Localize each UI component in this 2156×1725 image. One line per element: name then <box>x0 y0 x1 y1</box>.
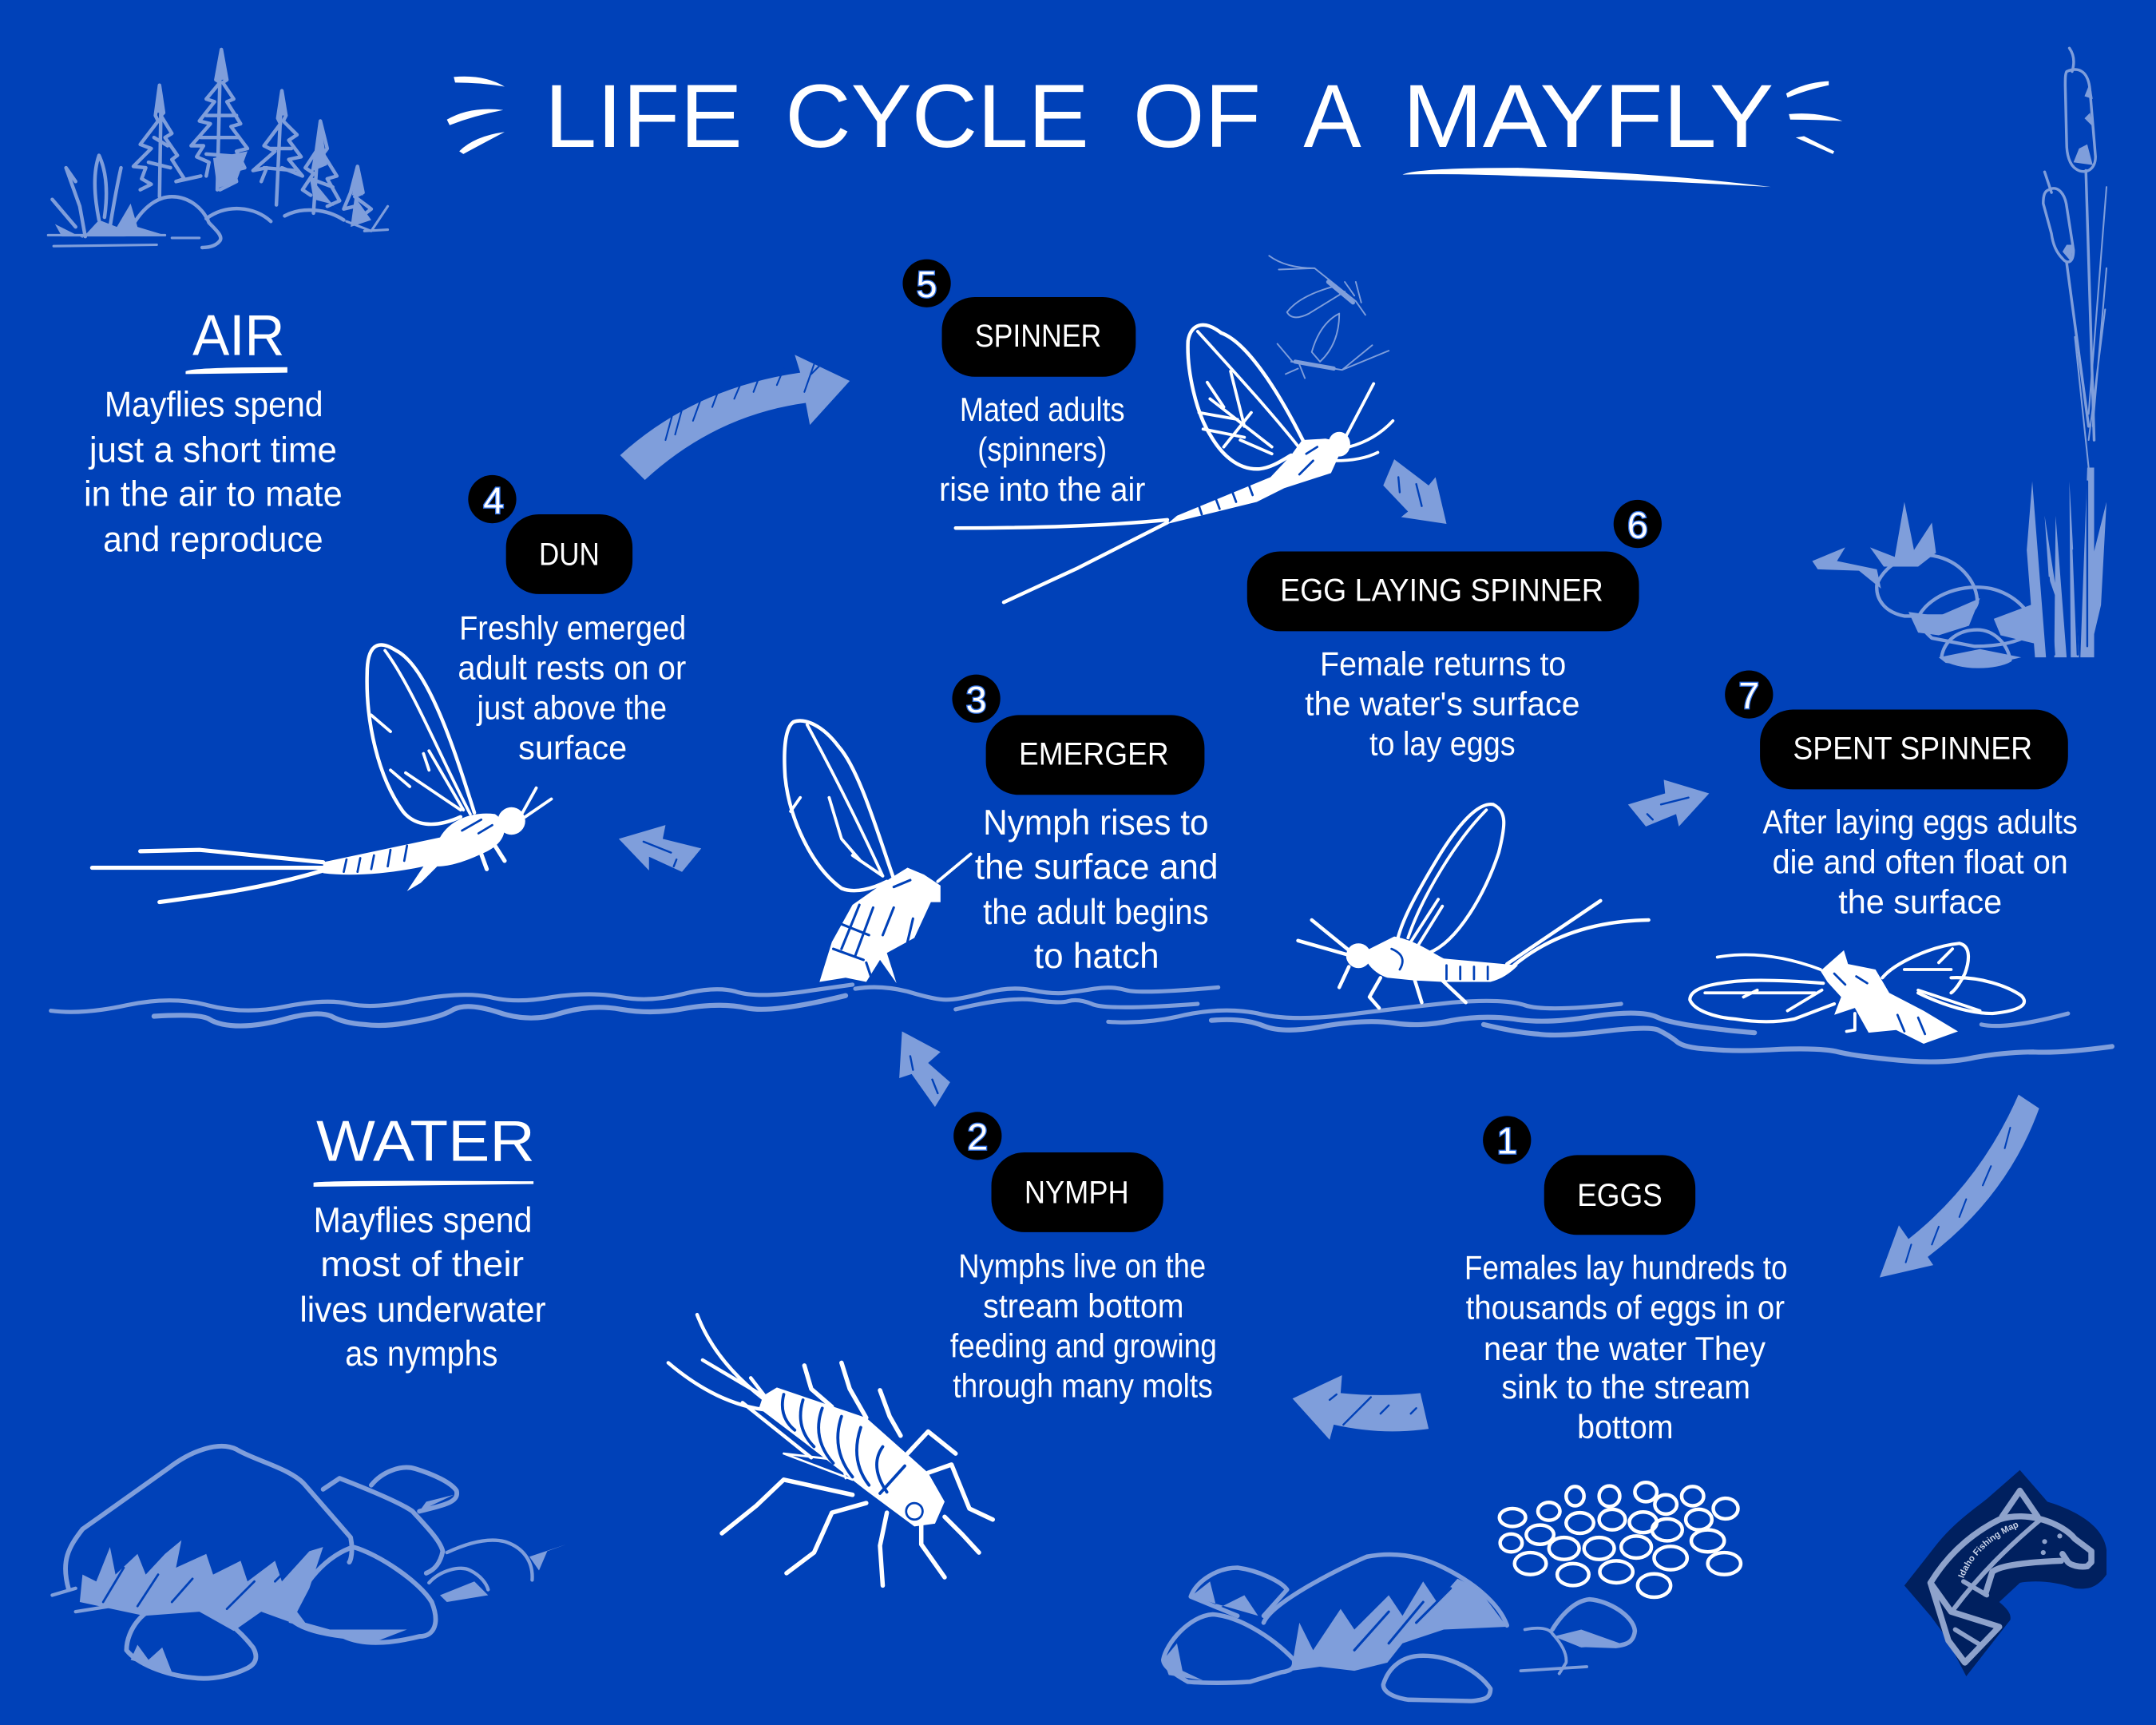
number badge 7 <box>1725 670 1773 719</box>
label: egg laying spinner <box>1247 551 1639 631</box>
insect: dun mayfly <box>92 644 551 902</box>
label: egg laying spinner: EGG LAYING SPINNER <box>1280 573 1603 608</box>
arrow: egg laying to spent spinner <box>1628 779 1709 827</box>
panel: step 6 egg laying spinner <box>1247 500 1662 762</box>
text: water description: lives underwater <box>299 1290 546 1330</box>
label: eggs: EGGS <box>1577 1178 1663 1213</box>
number badge 3: 3 <box>966 679 987 720</box>
text: eggs description: Females lay hundreds to <box>1464 1249 1788 1286</box>
text: egg laying description: the water's surface <box>1305 685 1580 722</box>
logo: Idaho Fishing Map fish <box>1904 1469 2106 1676</box>
panel: step 1 eggs <box>1464 1116 1788 1445</box>
illustration: pine trees and rocks <box>48 50 388 248</box>
text: spent spinner description <box>1763 803 2078 920</box>
text: dun description: surface <box>518 730 627 767</box>
text: dun description <box>458 610 686 767</box>
panel: step 4 dun <box>458 475 686 767</box>
insect: emerger <box>784 721 971 983</box>
illustration: river rocks right <box>1163 1555 1635 1701</box>
number badge 4 <box>468 475 517 523</box>
title <box>545 66 1774 166</box>
text: air description: just a short time <box>88 430 337 470</box>
label: nymph <box>992 1152 1163 1232</box>
number badge 7: 7 <box>1738 675 1759 716</box>
river water lines <box>51 985 2112 1062</box>
underline: water <box>314 1181 533 1187</box>
text: water description <box>299 1200 546 1374</box>
text: eggs description: sink to the stream <box>1501 1369 1750 1406</box>
insect: spent spinner <box>1690 943 2024 1044</box>
number badge 2 <box>953 1112 1001 1160</box>
arrow: dun to spinner <box>620 355 850 480</box>
panel: step 7 spent spinner <box>1725 670 2078 920</box>
number badge 1: 1 <box>1496 1120 1517 1162</box>
title: A <box>1303 66 1361 166</box>
text: egg laying description: Female returns to <box>1320 645 1566 682</box>
text: spinner description <box>939 391 1146 508</box>
text: water description: as nymphs <box>345 1334 497 1374</box>
underline: air <box>185 367 287 374</box>
illustration: cattails and reeds <box>1813 48 2106 667</box>
number badge 1 <box>1483 1116 1531 1164</box>
illustration: eggs <box>1500 1482 1741 1597</box>
text: eggs description: near the water They <box>1484 1330 1766 1367</box>
panel: step 2 nymph <box>950 1112 1217 1404</box>
text: air description: Mayflies spend <box>105 385 323 425</box>
heading: water: WATER <box>316 1109 535 1173</box>
insect: spinner <box>956 325 1393 602</box>
text: spinner description: Mated adults <box>960 391 1125 428</box>
text: spent spinner description: the surface <box>1838 883 2002 920</box>
label: spent spinner: SPENT SPINNER <box>1793 732 2032 767</box>
text: nymph description: through many molts <box>953 1367 1213 1404</box>
label: eggs <box>1544 1155 1695 1235</box>
insect: egg laying spinner <box>1298 804 1649 1008</box>
text: water description: most of their <box>320 1244 524 1284</box>
arrow: eggs to nymph <box>1293 1375 1429 1440</box>
text: air description: in the air to mate <box>84 474 343 514</box>
label: dun <box>506 514 632 594</box>
label: spinner <box>942 297 1135 377</box>
text: air description: and reproduce <box>103 519 323 559</box>
text: spent spinner description: After laying eggs adults <box>1763 803 2078 840</box>
text: dun description: just above the <box>476 690 667 727</box>
heading: air: AIR <box>192 303 284 367</box>
number badge 6: 6 <box>1627 504 1648 545</box>
text: emerger description <box>975 803 1219 976</box>
title: CYCLE <box>785 66 1089 166</box>
text: emerger description: the adult begins <box>983 892 1209 932</box>
text: nymph description: stream bottom <box>983 1288 1184 1325</box>
text: dun description: adult rests on or <box>458 650 686 687</box>
insect: nymph <box>668 1315 993 1585</box>
panel: step 3 emerger <box>952 675 1219 976</box>
arrow: nymph to emerger <box>899 1031 950 1107</box>
faded background mayflies <box>1269 256 1389 379</box>
title: OF <box>1133 66 1261 166</box>
logo: Idaho Fishing Map fish: Idaho Fishing Map <box>1958 1522 2019 1578</box>
text: egg laying description <box>1305 645 1580 762</box>
text: dun description: Freshly emerged <box>459 610 686 647</box>
text: nymph description <box>950 1248 1217 1404</box>
label: spinner: SPINNER <box>975 319 1101 354</box>
label: emerger: EMERGER <box>1019 736 1169 771</box>
text: emerger description: to hatch <box>1034 936 1159 976</box>
text: spinner description: rise into the air <box>939 471 1146 508</box>
title accent marks and underline <box>447 77 1842 187</box>
text: nymph description: feeding and growing <box>950 1328 1217 1365</box>
label: nymph: NYMPH <box>1024 1176 1129 1211</box>
label: dun: DUN <box>539 537 600 573</box>
text: eggs description: thousands of eggs in or <box>1466 1289 1785 1326</box>
text: emerger description: Nymph rises to <box>983 803 1209 843</box>
number badge 5: 5 <box>917 264 937 305</box>
label: emerger <box>986 715 1204 795</box>
text: eggs description: bottom <box>1577 1409 1674 1445</box>
number badge 3 <box>952 675 1001 723</box>
panel: step 5 spinner <box>902 260 1146 508</box>
title: LIFE <box>545 66 743 166</box>
text: eggs description <box>1464 1249 1788 1445</box>
number badge 4: 4 <box>483 479 504 521</box>
panel: air <box>84 303 343 559</box>
label: spent spinner <box>1760 710 2068 789</box>
title: MAYFLY <box>1402 66 1774 166</box>
number badge 2: 2 <box>967 1116 988 1158</box>
arrow: spinner to egg laying <box>1383 459 1446 524</box>
number badge 6 <box>1614 500 1662 548</box>
illustration: river rocks left <box>52 1446 566 1679</box>
panel: water <box>299 1109 546 1374</box>
text: air description <box>84 385 343 559</box>
arrow: emerger to dun <box>619 825 701 872</box>
text: egg laying description: to lay eggs <box>1369 725 1516 762</box>
text: nymph description: Nymphs live on the <box>958 1248 1206 1285</box>
arrow: spent spinner to eggs <box>1880 1095 2039 1278</box>
text: spent spinner description: die and often float on <box>1773 843 2068 880</box>
number badge 5 <box>902 260 951 307</box>
text: water description: Mayflies spend <box>314 1200 532 1240</box>
text: spinner description: (spinners) <box>977 431 1107 468</box>
text: emerger description: the surface and <box>975 847 1219 886</box>
